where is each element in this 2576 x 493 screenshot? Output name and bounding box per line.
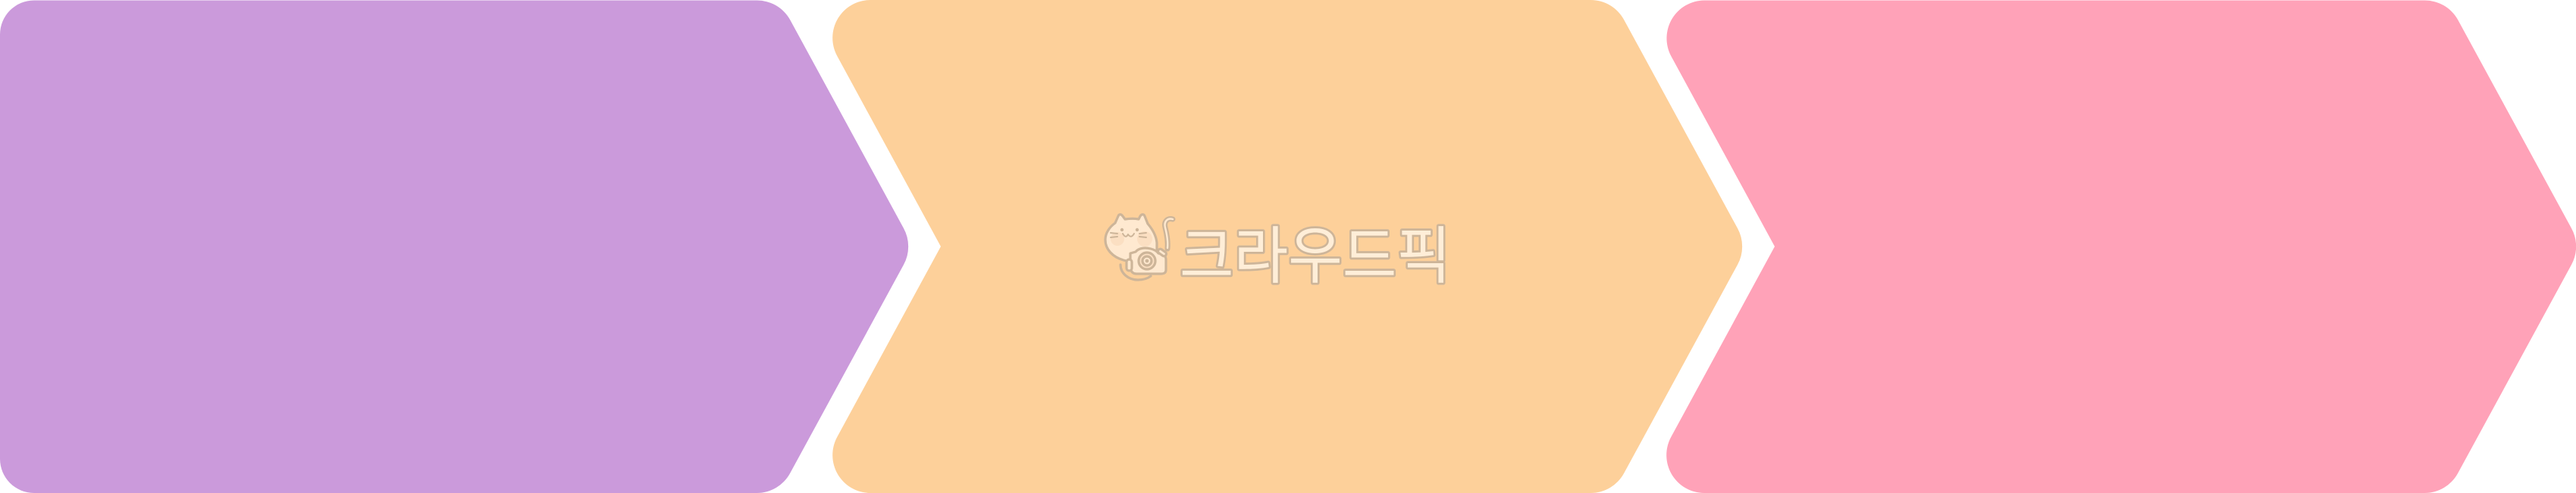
logo wordmark: 크라우드픽 bbox=[1180, 222, 1451, 291]
icon: cat with camera bbox=[1105, 215, 1173, 280]
cat head and body bbox=[1105, 215, 1157, 262]
camera body bbox=[1130, 248, 1166, 274]
panel: orange chevron bbox=[832, 0, 1742, 493]
camera lens bbox=[1139, 253, 1155, 269]
logo: crowdpic watermark bbox=[1105, 215, 1451, 291]
cat tail bbox=[1120, 265, 1151, 280]
panel: pink chevron bbox=[1666, 0, 2576, 493]
cat eyes bbox=[1120, 228, 1139, 231]
panel: purple arrow bbox=[0, 0, 908, 493]
camera grip bbox=[1127, 259, 1132, 271]
camera strap bbox=[1165, 219, 1173, 249]
cat cheeks bbox=[1111, 231, 1152, 246]
camera shutter bbox=[1157, 248, 1167, 257]
cat face bbox=[1111, 233, 1146, 237]
